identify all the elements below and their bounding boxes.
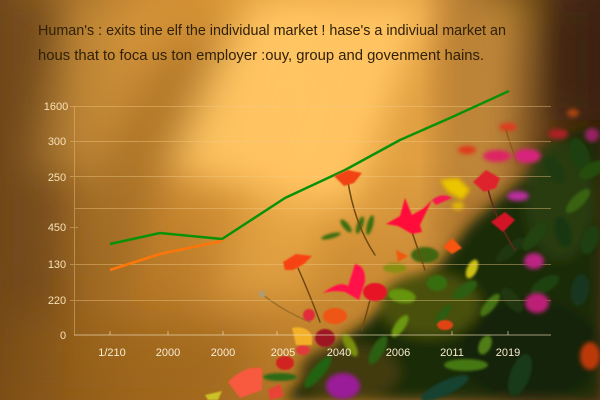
x axis labels: 2011 (440, 347, 464, 359)
x axis labels: 2000 (211, 347, 235, 359)
y axis labels: 250 (48, 172, 66, 184)
soft magenta and red blooms (326, 191, 600, 399)
y axis labels: 130 (48, 259, 66, 271)
heading text (38, 22, 506, 64)
foreground blossoms (205, 170, 600, 400)
series: green line (110, 91, 509, 244)
sharp blooms (205, 170, 515, 400)
y axis labels: 300 (48, 136, 66, 148)
x axis labels: 2019 (496, 347, 520, 359)
x axis labels (98, 347, 520, 359)
chart grid and axes (70, 106, 551, 335)
series: orange line (110, 241, 222, 270)
line chart (44, 91, 551, 342)
x axis labels: 2006 (386, 347, 410, 359)
heading text: hous that to foca us ton employer :ouy, group and govenment hains. (38, 47, 484, 64)
x axis labels: 2000 (156, 347, 180, 359)
x axis (74, 331, 551, 359)
y axis labels: 0 (60, 330, 66, 342)
x axis labels: 2040 (327, 347, 351, 359)
heading text: Human's : exits tine elf the individual market ! hase's a indiviual market an (38, 22, 506, 39)
stems (263, 130, 518, 330)
y axis labels (44, 101, 68, 342)
x axis labels: 2005 (271, 347, 295, 359)
mid-ground leaves (263, 135, 600, 400)
flowering plant: background mass (258, 109, 600, 400)
y axis labels: 450 (48, 222, 66, 234)
y axis labels: 220 (48, 295, 66, 307)
x axis labels: 1/210 (98, 347, 126, 359)
out-of-focus blossoms (440, 109, 599, 210)
dark foliage mass (285, 125, 600, 400)
bud (258, 290, 266, 298)
y axis labels: 1600 (44, 101, 68, 113)
